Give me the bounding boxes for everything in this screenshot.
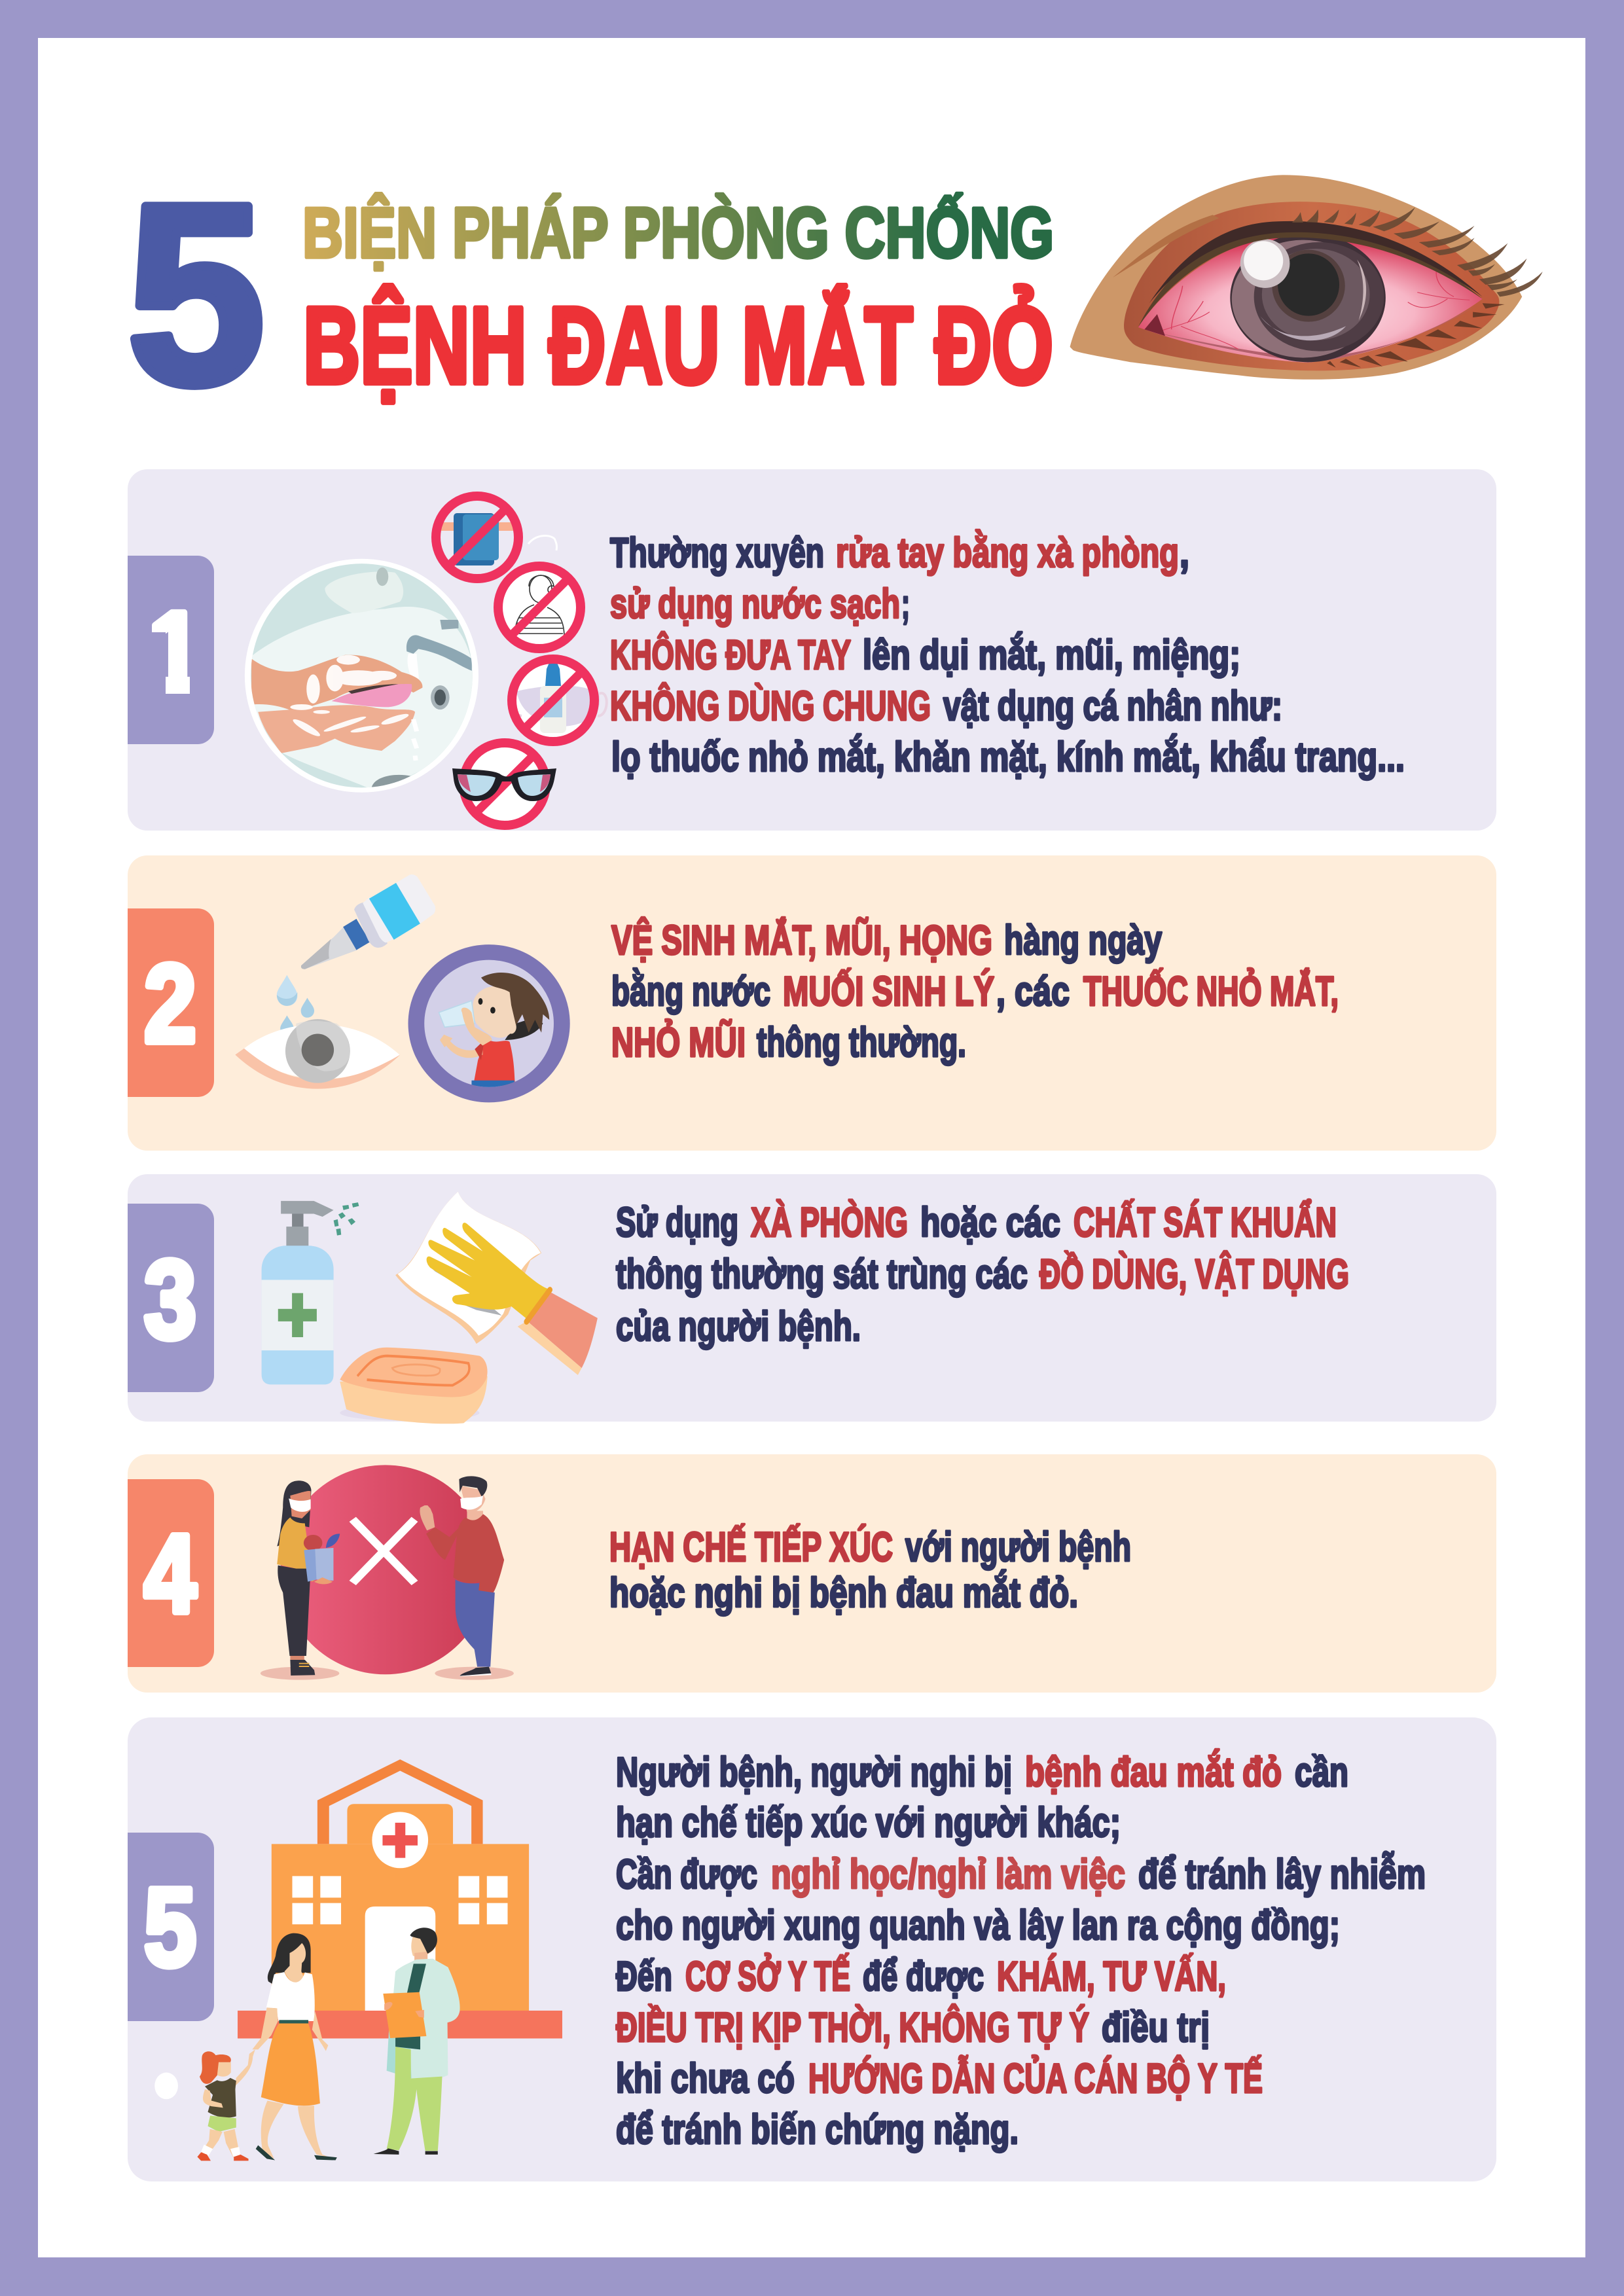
text block 3: ĐỒ DÙNG, VẬT DỤNG bbox=[1039, 1251, 1349, 1297]
icon: no shared glasses bbox=[452, 743, 556, 825]
text block 2: thông thường. bbox=[757, 1020, 966, 1066]
number badge 3 bbox=[128, 1204, 214, 1392]
text block 5: CƠ SỞ Y TẾ bbox=[685, 1953, 850, 2000]
text block 1: rửa tay bằng xà phòng bbox=[836, 529, 1179, 576]
text block 4: HẠN CHẾ TIẾP XÚC bbox=[609, 1524, 893, 1570]
panel background bbox=[128, 469, 1496, 831]
text block 5: để tránh lây nhiễm bbox=[1138, 1852, 1426, 1897]
text block 5: điều trị bbox=[1102, 2005, 1210, 2051]
text block 4 bbox=[609, 1524, 1131, 1616]
text block 2: bằng nước bbox=[611, 968, 770, 1014]
text block 5: khi chưa có bbox=[616, 2056, 795, 2102]
text block 2 bbox=[611, 917, 1339, 1066]
text block 3: XÀ PHÒNG bbox=[751, 1200, 908, 1246]
illustration: two masked people keeping distance bbox=[261, 1465, 514, 1680]
text block 4: với người bệnh bbox=[905, 1524, 1131, 1570]
panel 3: disinfecting bbox=[128, 1174, 1496, 1424]
text block 5: để được bbox=[863, 1954, 984, 2000]
header bbox=[127, 151, 1543, 438]
text block 1: vật dụng cá nhân như: bbox=[943, 683, 1282, 729]
icon: gloved hand wiping with cloth bbox=[395, 1192, 598, 1375]
number badge 5 bbox=[128, 1833, 214, 2021]
text block 3: Sử dụng bbox=[616, 1200, 738, 1246]
text block 2: VỆ SINH MẮT, MŨI, HỌNG bbox=[611, 917, 992, 963]
text block 4: hoặc nghi bị bệnh đau mắt đỏ. bbox=[609, 1570, 1078, 1616]
text block 5: hạn chế tiếp xúc với người khác; bbox=[616, 1800, 1121, 1846]
number badge 2 bbox=[128, 908, 214, 1097]
text block 5: cho người xung quanh và lây lan ra cộng đồng; bbox=[616, 1903, 1340, 1948]
text block 1: lên dụi mắt, mũi, miệng; bbox=[863, 632, 1240, 678]
icon: eye drops bbox=[235, 874, 435, 1089]
text block 1 bbox=[610, 529, 1405, 780]
number badge 1 bbox=[128, 556, 214, 744]
number badge 3: 3 bbox=[144, 1238, 196, 1362]
text block 5: ĐIỀU TRỊ KỊP THỜI, KHÔNG TỰ Ý bbox=[616, 2004, 1089, 2051]
text block 1: KHÔNG DÙNG CHUNG bbox=[610, 683, 931, 729]
text block 2: hàng ngày bbox=[1004, 918, 1162, 963]
number badge 2: 2 bbox=[144, 942, 196, 1066]
text block 2: MUỐI SINH LÝ bbox=[783, 968, 994, 1014]
number badge 5: 5 bbox=[144, 1865, 196, 1990]
photo: washing hands with soap bbox=[245, 559, 478, 793]
text block 5: Người bệnh, người nghi bị bbox=[616, 1749, 1012, 1795]
text block 1: sử dụng nước sạch bbox=[610, 581, 900, 627]
text block 1: lọ thuốc nhỏ mắt, khăn mặt, kính mắt, khẩu trang... bbox=[611, 734, 1405, 780]
big number 5: 5 bbox=[127, 151, 265, 438]
text block 2: THUỐC NHỎ MẮT, bbox=[1083, 968, 1339, 1014]
text block 5: HƯỚNG DẪN CỦA CÁN BỘ Y TẾ bbox=[808, 2055, 1263, 2102]
text block 3: CHẤT SÁT KHUẨN bbox=[1074, 1199, 1337, 1246]
text block 5: Đến bbox=[616, 1954, 672, 2000]
icon: do not touch eyes bbox=[498, 566, 581, 649]
panel background bbox=[128, 1174, 1496, 1422]
title line 1: BIỆN PHÁP PHÒNG CHỐNG bbox=[302, 193, 1054, 273]
text block 3: của người bệnh. bbox=[616, 1304, 861, 1350]
number badge 1: 1 bbox=[148, 588, 203, 717]
number badge 4 bbox=[128, 1479, 214, 1667]
text block 1: , bbox=[1180, 530, 1189, 576]
text block 5: cần bbox=[1295, 1749, 1348, 1795]
text block 3: thông thường sát trùng các bbox=[616, 1251, 1028, 1297]
text block 5: nghỉ học/nghỉ làm việc bbox=[771, 1852, 1125, 1897]
text block 1: ; bbox=[901, 581, 910, 627]
panel background bbox=[128, 855, 1496, 1151]
title line 2: BỆNH ĐAU MẮT ĐỎ bbox=[303, 285, 1053, 406]
illustration: hospital with family and doctor bbox=[154, 1759, 562, 2161]
text block 1: KHÔNG ĐƯA TAY bbox=[610, 632, 851, 678]
icon: bar of soap bbox=[340, 1348, 488, 1424]
panel 2: nose and eye hygiene bbox=[128, 855, 1496, 1151]
number badge 4: 4 bbox=[144, 1512, 196, 1636]
text block 2: , các bbox=[996, 969, 1070, 1014]
panel background bbox=[128, 1454, 1496, 1693]
panel 1: hand washing bbox=[128, 469, 1496, 831]
icon: no shared eye drops or masks bbox=[510, 659, 607, 742]
text block 5: bệnh đau mắt đỏ bbox=[1025, 1749, 1282, 1795]
text block 3: hoặc các bbox=[920, 1200, 1060, 1246]
text block 5: KHÁM, TƯ VẤN, bbox=[997, 1953, 1226, 2000]
text block 5: Cần được bbox=[616, 1852, 757, 1897]
icon: sanitizer bottle bbox=[262, 1201, 359, 1384]
text block 5: để tránh biến chứng nặng. bbox=[616, 2107, 1019, 2153]
panel 5: go to a medical facility bbox=[128, 1717, 1496, 2181]
icon: boy drinking water bbox=[408, 944, 570, 1102]
panel 4: limit contact bbox=[128, 1454, 1496, 1693]
icon: red eye bbox=[1070, 175, 1543, 380]
icon: no shared towel bbox=[436, 496, 557, 579]
panel background bbox=[128, 1717, 1496, 2181]
text block 1: Thường xuyên bbox=[610, 530, 824, 576]
text block 3 bbox=[616, 1199, 1349, 1350]
text block 5 bbox=[616, 1749, 1426, 2153]
text block 2: NHỎ MŨI bbox=[611, 1019, 746, 1066]
